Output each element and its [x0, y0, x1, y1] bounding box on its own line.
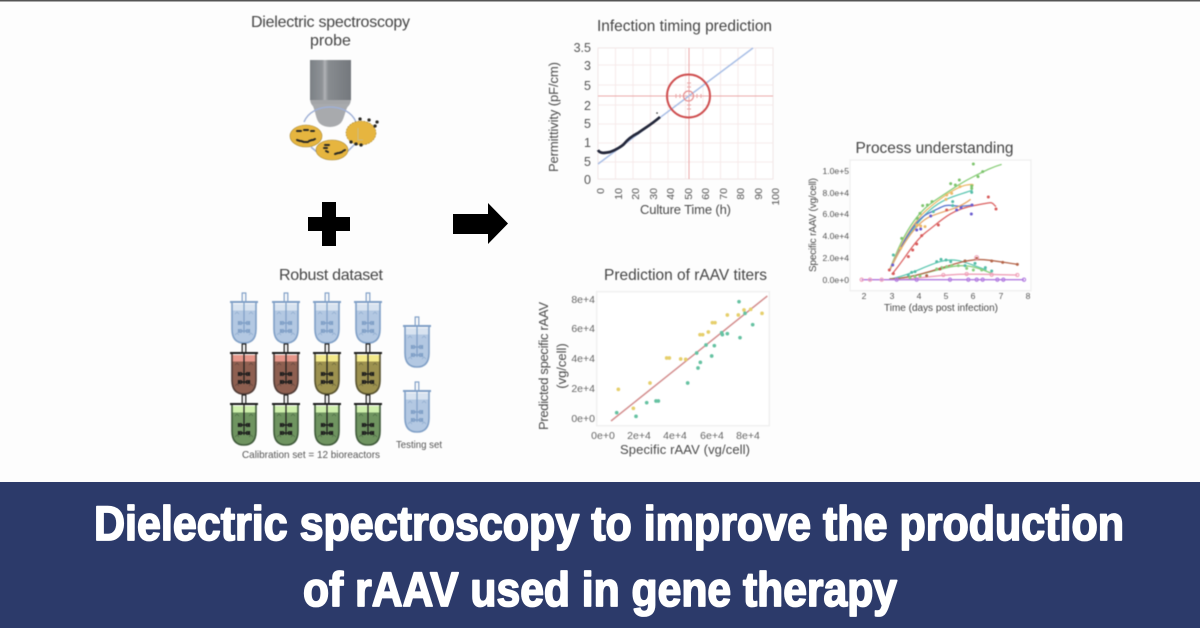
heading: probe: probe [310, 32, 351, 50]
x-axis ticks: 100 [770, 188, 782, 206]
heading: process understanding: Process understanding [856, 140, 1014, 157]
chart: specific rAAV over time [850, 160, 1031, 291]
icon: right arrow [453, 203, 508, 244]
x-axis title: Culture Time (h) [640, 202, 731, 217]
x-axis ticks: 50 [683, 188, 695, 200]
bioreactors: row blue [230, 293, 382, 343]
x-axis ticks: 10 [613, 188, 625, 200]
panel: dielectric spectroscopy probe [251, 14, 410, 160]
x-axis ticks: 6 [971, 291, 976, 301]
x-axis ticks [862, 291, 1031, 301]
y-axis title: Predicted specific rAAV [536, 302, 551, 430]
x-axis ticks: 60 [700, 188, 712, 200]
x-axis ticks: 0 [595, 188, 607, 194]
x-axis ticks: 20 [630, 188, 642, 200]
x-axis ticks: 2e+4 [627, 430, 651, 442]
panel: prediction of rAAV titers [536, 267, 769, 457]
y-axis ticks: 2e+4 [571, 383, 595, 395]
icon: cell left [290, 125, 322, 147]
x-axis ticks: 30 [648, 188, 660, 200]
y-axis ticks: 0e+0 [571, 413, 595, 425]
y-axis ticks: 4e+4 [571, 353, 595, 365]
bioreactors: row green [230, 395, 382, 445]
y-axis ticks: 5 [584, 155, 591, 169]
banner title: of rAAV used in gene therapy [303, 564, 897, 617]
y-axis title [536, 302, 569, 430]
x-axis ticks: 5 [944, 291, 949, 301]
y-axis title: (vg/cell) [554, 343, 569, 389]
x-axis ticks: 8 [1026, 291, 1031, 301]
x-axis ticks: 4 [917, 291, 922, 301]
y-axis ticks: 3.5 [574, 41, 591, 55]
y-axis ticks: 1 [584, 136, 591, 150]
y-axis ticks: 2.0e+4 [822, 253, 849, 263]
y-axis ticks: 4.0e+4 [822, 231, 849, 241]
chart: permittivity vs culture time [598, 48, 773, 179]
icon: cell middle [316, 140, 348, 160]
panel: process understanding [808, 140, 1031, 314]
icon: electric field arc [304, 107, 356, 153]
x-axis ticks: 7 [999, 291, 1004, 301]
bioreactors: row brown and olive [230, 344, 382, 394]
label: calibration set: Calibration set = 12 bioreactors [242, 449, 380, 461]
x-axis ticks: 80 [735, 188, 747, 200]
bioreactors: testing set [403, 317, 431, 432]
y-axis ticks: 6e+4 [571, 323, 595, 335]
panel: robust dataset [230, 267, 442, 461]
top edge line [0, 0, 1200, 2]
y-axis ticks [574, 41, 591, 187]
x-axis ticks [591, 430, 760, 442]
x-axis ticks: 40 [665, 188, 677, 200]
y-axis ticks: 8e+4 [571, 294, 595, 306]
heading: prediction of rAAV titers: Prediction of rAAV titers [604, 267, 767, 284]
heading: robust dataset: Robust dataset [279, 267, 384, 284]
x-axis ticks: 8e+4 [736, 430, 760, 442]
heading: infection timing prediction: Infection timing prediction [597, 18, 772, 35]
x-axis title: Time (days post infection) [884, 303, 998, 314]
y-axis ticks: 3 [584, 59, 591, 73]
label: testing set: Testing set [396, 439, 442, 451]
y-axis ticks: 5 [584, 79, 591, 93]
heading: probe: Dielectric spectroscopy [251, 14, 410, 31]
y-axis title: Permittivity (pF/cm) [546, 62, 561, 172]
x-axis title: Specific rAAV (vg/cell) [620, 442, 750, 457]
icon: cell right [346, 119, 377, 145]
y-axis ticks: 1.0e+5 [822, 166, 849, 176]
x-axis ticks: 3 [890, 291, 895, 301]
panel: infection timing prediction [546, 18, 782, 217]
y-axis ticks: 5 [584, 117, 591, 131]
chart: predicted vs measured scatter [597, 292, 769, 426]
x-axis ticks: 0e+0 [591, 430, 615, 442]
x-axis ticks [595, 188, 782, 206]
x-axis ticks: 90 [753, 188, 765, 200]
y-axis ticks: 8.0e+4 [822, 188, 849, 198]
y-axis ticks [571, 294, 595, 425]
x-axis ticks: 2 [862, 291, 867, 301]
x-axis ticks: 6e+4 [700, 430, 724, 442]
y-axis ticks: 2 [584, 99, 591, 113]
y-axis ticks: 0.0e+0 [822, 275, 849, 285]
icon: plus sign [308, 202, 350, 246]
y-axis title: Specific rAAV (vg/cell) [808, 178, 819, 272]
y-axis ticks [822, 166, 849, 285]
x-axis ticks: 70 [718, 188, 730, 200]
banner [0, 482, 1200, 628]
icon: probe body [310, 60, 351, 127]
x-axis ticks: 4e+4 [663, 430, 687, 442]
y-axis ticks: 0 [584, 173, 591, 187]
y-axis ticks: 6.0e+4 [822, 209, 849, 219]
